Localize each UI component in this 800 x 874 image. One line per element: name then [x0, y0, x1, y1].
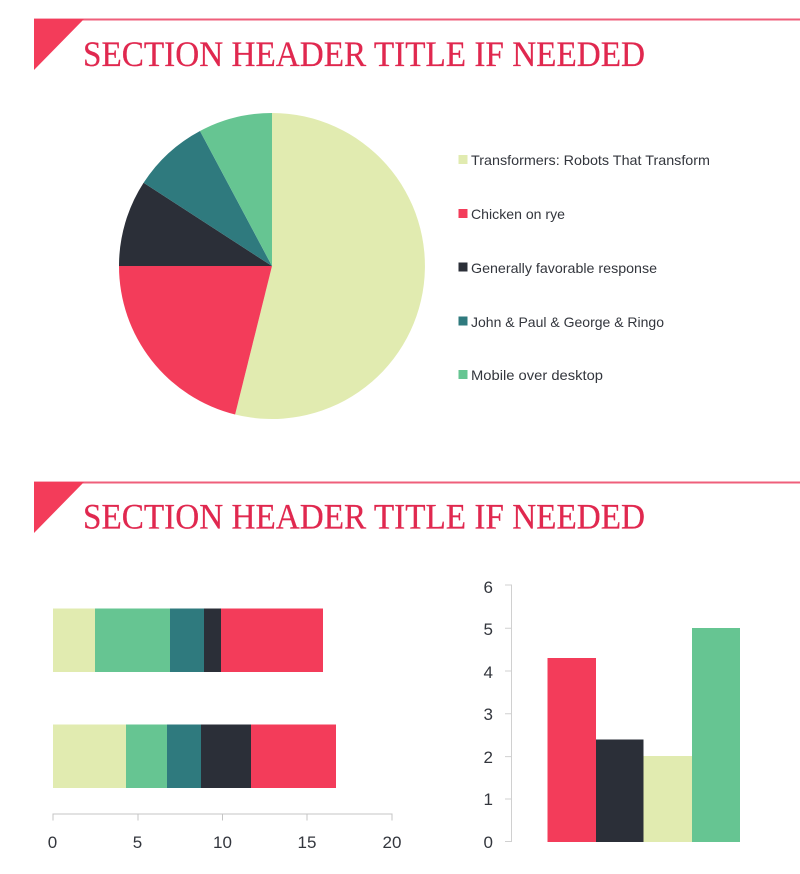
vertical bar chart	[484, 578, 740, 852]
horizontal axis: 5	[133, 833, 142, 852]
pie legend: Chicken on rye	[471, 206, 565, 222]
vertical axis: 6	[484, 578, 493, 597]
vertical axis: 2	[484, 748, 493, 767]
pie legend	[458, 152, 710, 383]
vertical axis	[484, 578, 512, 852]
pie legend: Transformers: Robots That Transform	[471, 152, 710, 168]
bottom bar	[53, 724, 336, 788]
vertical axis: 4	[484, 663, 493, 682]
header 1 title: SECTION HEADER TITLE IF NEEDED	[83, 34, 645, 74]
header 2 triangle	[34, 482, 84, 533]
horizontal axis	[48, 814, 401, 852]
vertical axis: 1	[484, 790, 493, 809]
vertical axis: 0	[484, 833, 493, 852]
pie legend: Mobile over desktop	[471, 367, 603, 383]
top bar	[53, 608, 323, 672]
columns	[548, 628, 740, 842]
horizontal axis: 20	[383, 833, 401, 852]
header 1 triangle	[34, 19, 84, 70]
section header 2	[34, 482, 800, 536]
vertical axis: 3	[484, 705, 493, 724]
pie chart	[119, 113, 425, 419]
horizontal axis: 15	[298, 833, 316, 852]
vertical axis: 5	[484, 620, 493, 639]
stacked horizontal bar chart	[48, 608, 401, 852]
horizontal axis: 10	[213, 833, 232, 852]
header 2 title: SECTION HEADER TITLE IF NEEDED	[83, 496, 645, 536]
horizontal axis: 0	[48, 833, 57, 852]
pie legend: Generally favorable response	[471, 260, 657, 276]
pie legend: John & Paul & George & Ringo	[471, 314, 664, 330]
section header 1	[34, 18, 800, 74]
